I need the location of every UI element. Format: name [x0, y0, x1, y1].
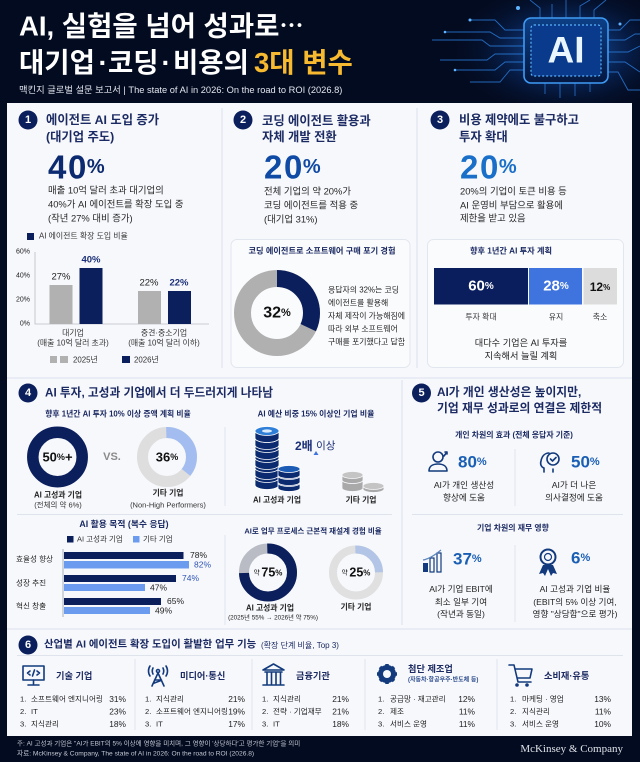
description 3 [460, 186, 567, 224]
bar chart: adoption by company size: (매출 10억 달러 이하) [128, 338, 200, 348]
column: finance: 전략 · 기업재무 [273, 706, 322, 716]
donut explanation: 응답자의 32%는 코딩 [328, 284, 399, 294]
donut: high performers 50%+ [33, 432, 82, 482]
bar chart: AI purposes: 49% [155, 606, 172, 616]
title: AI, 실험을 넘어 성과로⋯ [19, 10, 303, 42]
subheading: AI purposes: AI 활용 목적 (복수 응답) [79, 518, 169, 529]
stacked bar: investment plan: 28% [543, 278, 569, 294]
text: decisions: 의사결정에 도움 [545, 492, 603, 502]
stack labels: 기타 기업 [346, 494, 376, 504]
panel: 5 productivity vs finance [412, 384, 623, 622]
subheading: individual effect: 개인 차원의 효과 (전체 응답자 기준) [455, 430, 573, 440]
bar chart: adoption by company size: 중견·중소기업 [141, 328, 187, 338]
column: finance: 3. [262, 720, 268, 728]
subheading: investment increase: 향후 1년간 AI 투자 10% 이상 증액 계획 비율 [45, 408, 191, 418]
column: media: 미디어·통신 [180, 670, 225, 681]
column: manufacturing: 제조 [390, 707, 404, 716]
icon: medal [539, 550, 557, 576]
column: tech: 기술 기업 [56, 670, 92, 681]
bar legend: AI 고성과 기업 [77, 534, 123, 544]
description 2: 코딩 에이전트를 적용 중 [264, 200, 358, 210]
column: tech: 3. [20, 720, 26, 728]
donut labels: (Non-High Performers) [130, 500, 206, 510]
heading 3: 비용 제약에도 불구하고 [459, 112, 579, 127]
year legend: 2025년 [73, 354, 98, 364]
text: decisions [545, 480, 603, 502]
heading 4: AI 투자, 고성과 기업에서 더 두드러지게 나타남 [45, 386, 273, 400]
column: media: 17% [228, 719, 246, 729]
bar chart: adoption by company size: 20% [16, 296, 30, 304]
card: investment plan [428, 240, 624, 368]
icon: cart [509, 665, 532, 687]
text: decisions: AI가 더 나은 [552, 480, 596, 490]
column: consumer: 지식관리 [522, 706, 550, 716]
stat 6%: 6% [571, 548, 590, 568]
column: manufacturing: 3. [378, 720, 384, 728]
bar chart: adoption by company size: 22% [169, 278, 189, 288]
column: consumer [509, 665, 612, 729]
panel: 3 cost constraints [428, 110, 624, 368]
column: consumer: 1. [510, 694, 516, 704]
bar chart: adoption by company size: 40% [16, 272, 30, 280]
bar chart: adoption by company size: (매출 10억 달러 초과) [37, 338, 109, 348]
bar legend: 기타 기업 [143, 534, 173, 544]
column: tech: IT [31, 707, 38, 716]
bar chart: AI purposes [16, 549, 211, 617]
text: high performers share: (EBIT의 5% 이상 기여, [533, 596, 617, 607]
footnote and source [17, 738, 300, 758]
column: tech [20, 666, 127, 729]
column: finance: 2. [262, 707, 268, 716]
icon: bank [263, 664, 284, 685]
bar chart: adoption by company size [16, 248, 209, 348]
column: tech: 1. [20, 694, 26, 704]
card conclusion [475, 337, 567, 361]
bar chart: AI purposes: 혁신 창출 [16, 600, 46, 610]
bar chart: AI purposes: 효율성 향상 [16, 554, 53, 564]
column: media: 소프트웨어 엔지니어링 [156, 706, 228, 716]
redesign donut labels: AI 고성과 기업 [246, 602, 294, 612]
redesign donut labels: (2025년 55% → 2026년 약 75%) [228, 612, 318, 622]
number badge 1 [18, 110, 38, 130]
donut labels: 기타 기업 [153, 488, 183, 498]
heading 1 [46, 112, 159, 144]
icon: AI chip illustration [432, 0, 640, 118]
column: manufacturing: 12% [458, 694, 476, 704]
description 1 [48, 184, 184, 224]
title: 3대 변수 [254, 46, 353, 78]
subheading: process redesign: AI로 업무 프로세스 근본적 재설계 경험 비율 [244, 526, 382, 536]
heading 6: (확장 단계 비율, Top 3) [261, 640, 339, 650]
donut: high performers 75%: 약 75% [254, 566, 282, 580]
bar chart: AI purposes: 47% [150, 582, 167, 592]
chart legend: AI 에이전트 확장 도입 비율 [39, 230, 128, 240]
text: high performers share [533, 584, 618, 619]
column: finance: IT [273, 720, 280, 728]
card conclusion: 대다수 기업은 AI 투자를 [475, 337, 567, 348]
donut explanation: 따라 외부 소프트웨어 [328, 324, 398, 334]
donut: others 36%: 36% [156, 450, 178, 464]
title: · [98, 46, 108, 78]
text: productivity: 향상에 도움 [443, 492, 485, 502]
column: consumer: 서비스 운영 [522, 718, 559, 728]
stacked bar: investment plan [434, 268, 617, 322]
description 1: 40%가 AI 에이전트를 확장 도입 중 [48, 198, 184, 210]
bar chart: adoption by company size: 27% [51, 272, 71, 282]
donut labels: (전체의 약 6%) [34, 500, 82, 510]
column: media: 21% [228, 694, 246, 704]
heading 6: 산업별 AI 에이전트 확장 도입이 활발한 업무 기능 [44, 638, 257, 650]
subheading: budget share: AI 예산 비중 15% 이상인 기업 비율 [258, 408, 374, 418]
column: manufacturing: 11% [459, 706, 476, 716]
subtitle: 맥킨지 글로벌 설문 보고서 | The state of AI in 2026: On the road to ROI (2026.8) [19, 85, 342, 95]
heading 2: 코딩 에이전트 활용과 [262, 113, 371, 128]
column: media: 지식관리 [156, 694, 184, 704]
donut chart 32%: 32% [263, 304, 291, 322]
column: media: 1. [145, 694, 151, 704]
description 3: 제한을 받고 있음 [460, 212, 526, 224]
bar chart: adoption by company size: 60% [16, 248, 30, 256]
panel: 2 coding agents [231, 110, 410, 368]
column: consumer: 11% [595, 706, 612, 716]
heading 5: AI가 개인 생산성은 높이지만, [437, 385, 581, 399]
text: EBIT: (작년과 동일) [437, 609, 485, 619]
year legend [50, 354, 159, 364]
bar chart: AI purposes: 65% [167, 596, 184, 606]
bar chart: AI purposes: 82% [194, 560, 211, 570]
stat 50%: 50% [571, 452, 600, 472]
stat 40%: 40% [48, 148, 106, 186]
heading 6 [44, 638, 339, 650]
icon: rising bars [423, 550, 441, 572]
footnote and source: 주: AI 고성과 기업은 "AI가 EBIT의 5% 이상에 영향을 미치며, 그 영향이 '상당하다'고 평가한 기업"을 의미 [17, 738, 300, 748]
title: 비용의 [173, 46, 249, 78]
description 2: 전체 기업의 약 20%가 [264, 186, 351, 196]
panel: 1 agent AI adoption [16, 110, 209, 364]
column: finance: 21% [332, 706, 350, 716]
heading 1: 에이전트 AI 도입 증가 [46, 112, 159, 127]
donut labels [34, 488, 206, 510]
column: finance: 1. [262, 694, 268, 704]
callout: more than double: 2배 이상 [295, 439, 336, 453]
column: finance [262, 664, 350, 729]
number badge 6: 6 [25, 639, 31, 651]
stacked bar: investment plan: 유지 [549, 312, 563, 322]
number badge 2: 2 [240, 114, 246, 126]
number badge 2 [234, 110, 252, 130]
text: EBIT: 최소 일부 기여 [435, 596, 487, 607]
heading 2: 자체 개발 전환 [262, 130, 337, 144]
subheading: corporate impact: 기업 차원의 재무 영향 [477, 522, 549, 532]
number badge 1: 1 [25, 114, 31, 126]
column: consumer: 13% [594, 694, 612, 704]
column: tech: 소프트웨어 엔지니어링 [31, 694, 103, 704]
column: manufacturing: 1. [378, 694, 384, 704]
heading 3 [459, 112, 579, 144]
column: media: 2. [145, 707, 151, 716]
heading 1: (대기업 주도) [46, 129, 114, 144]
donut: high performers 75% [244, 548, 292, 596]
logo: McKinsey & Company: McKinsey & Company [520, 743, 623, 755]
icon: gear [377, 664, 397, 684]
text: high performers share: AI 고성과 기업 비율 [540, 584, 610, 594]
title: 대기업 [19, 46, 95, 78]
stacked bar: investment plan: 12% [590, 280, 610, 294]
description 1: (작년 27% 대비 증가) [48, 212, 133, 224]
column: tech: 2. [20, 707, 26, 716]
column: finance: 금융기관 [296, 670, 330, 681]
bar chart: adoption by company size: 0% [20, 320, 30, 328]
bar chart: AI purposes: 78% [190, 550, 207, 560]
bar chart: adoption by company size: 22% [139, 278, 159, 288]
icon: person with arrow [429, 452, 447, 471]
heading 2 [262, 113, 371, 144]
column: consumer: 소비재·유통 [544, 670, 590, 681]
vs label: VS. [103, 451, 121, 463]
column: manufacturing: 2. [378, 707, 384, 716]
number badge 5: 5 [418, 387, 425, 399]
stat 20% coding: 20% [264, 148, 322, 186]
column: manufacturing [377, 663, 478, 729]
stack labels: AI 고성과 기업 [253, 494, 301, 504]
column: tech: 지식관리 [31, 718, 59, 728]
heading 5 [437, 385, 602, 415]
redesign donut labels [228, 602, 371, 622]
column: tech: 23% [109, 706, 127, 716]
column: consumer: 3. [510, 720, 516, 728]
text: EBIT: AI가 기업 EBIT에 [429, 584, 493, 594]
number badge 4: 4 [25, 387, 32, 399]
number badge 3 [430, 110, 450, 130]
stat 37%: 37% [453, 550, 482, 568]
number badge 5 [412, 384, 431, 402]
stat 80%: 80% [458, 452, 487, 472]
column: tech: 18% [109, 719, 127, 729]
donut explanation [328, 284, 405, 346]
column: manufacturing: 첨단 제조업 [408, 663, 453, 674]
icon: AI chip illustration: AI [548, 30, 584, 70]
column: manufacturing: 11% [459, 719, 476, 729]
text: productivity: AI가 개인 생산성 [434, 480, 494, 490]
panel: 6 functions by industry [17, 636, 623, 730]
column: consumer: 2. [510, 707, 516, 716]
panel: 4 high performers [16, 384, 392, 625]
bar chart: adoption by company size: 40% [81, 254, 101, 266]
donut: others 36% [142, 432, 192, 482]
column: tech: 31% [109, 694, 127, 704]
description 2 [264, 186, 358, 224]
stack labels [253, 494, 376, 504]
column: finance: 18% [332, 719, 350, 729]
stacked bar: investment plan: 60% [468, 278, 494, 294]
description 3: AI 운영비 부담으로 활용에 [460, 200, 563, 210]
icon: monitor code [23, 666, 44, 685]
icon: broadcast tower [148, 666, 168, 686]
title: · [162, 46, 171, 78]
donut explanation: 구매를 포기했다고 답함 [328, 336, 405, 346]
bar chart: AI purposes: 74% [182, 573, 199, 583]
year legend: 2026년 [134, 354, 159, 364]
column: media: 19% [228, 706, 246, 716]
text: high performers share: 영향 "상당함"으로 평가) [533, 608, 618, 619]
column: media [145, 666, 246, 729]
column: manufacturing: 공급망 · 재고관리 [390, 694, 446, 704]
number badge 3: 3 [437, 114, 443, 126]
description 3: 20%의 기업이 토큰 비용 등 [460, 186, 567, 196]
bar chart: adoption by company size: 대기업 [62, 328, 84, 338]
bar chart: AI purposes: 성장 추진 [16, 578, 46, 588]
description 2: (대기업 31%) [264, 214, 318, 224]
number badge 4 [18, 384, 38, 402]
card: software purchase abandonment [231, 240, 410, 368]
stat 20% cost: 20% [460, 148, 518, 186]
heading 5: 기업 재무 성과로의 연결은 제한적 [437, 401, 602, 415]
column: consumer: 마케팅 · 영업 [522, 694, 564, 704]
heading 3: 투자 확대 [459, 129, 508, 144]
text: EBIT [429, 584, 493, 619]
column: consumer: 10% [594, 719, 612, 729]
column: finance: 21% [332, 694, 350, 704]
stacked bar: investment plan: 투자 확대 [465, 312, 497, 322]
bar legend [67, 534, 173, 544]
column: media: 3. [145, 720, 151, 728]
donut: others 25% [333, 550, 379, 596]
card conclusion: 지속해서 늘릴 계획 [485, 350, 557, 361]
icon: head with check [541, 453, 559, 472]
number badge 6 [18, 636, 38, 654]
card heading: 향후 1년간 AI 투자 계획 [470, 246, 552, 256]
icon: coin stacks comparison [255, 426, 384, 493]
donut: high performers 50%+: 50%+ [42, 450, 73, 464]
redesign donut labels: 기타 기업 [341, 602, 371, 612]
text: productivity [434, 480, 494, 502]
donut explanation: 에이전트를 활용해 [328, 298, 388, 308]
donut chart 32% [242, 278, 312, 348]
title: 코딩 [108, 46, 159, 78]
column: manufacturing: (자동차·항공우주·반도체 등) [408, 676, 478, 684]
column: media: IT [156, 720, 163, 728]
column: finance: 지식관리 [273, 694, 301, 704]
footnote and source: 자료: McKinsey & Company, The state of AI in 2026: On the road to ROI (2026.8) [17, 748, 254, 758]
donut labels: AI 고성과 기업 [34, 490, 82, 500]
column: manufacturing: 서비스 운영 [390, 718, 427, 728]
card heading: 코딩 에이전트로 소프트웨어 구매 포기 경험 [249, 246, 395, 256]
stacked bar: investment plan: 축소 [593, 312, 607, 322]
description 1: 매출 10억 달러 초과 대기업의 [48, 184, 164, 196]
donut: others 25%: 약 25% [342, 566, 370, 580]
donut explanation: 자체 제작이 가능해짐에 [328, 310, 405, 320]
title [19, 10, 353, 78]
